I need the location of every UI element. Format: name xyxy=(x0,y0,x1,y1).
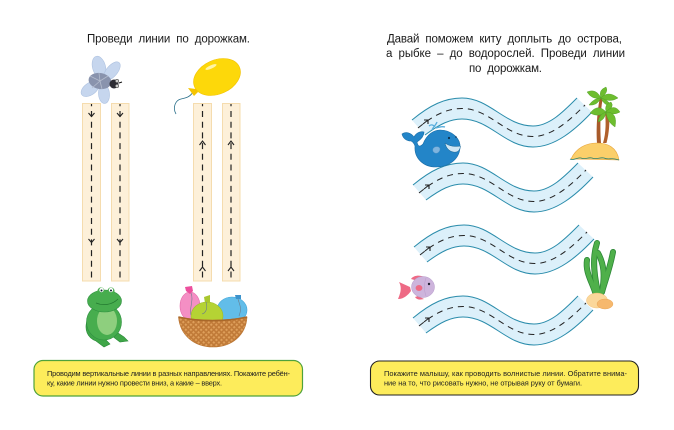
note: left xyxy=(34,360,302,396)
icon: fly xyxy=(78,55,123,104)
title: right page xyxy=(386,34,625,75)
note: right xyxy=(370,361,638,395)
icon: palm island xyxy=(570,87,620,160)
note: left: Проводим вертикальные линии в разных направлениях. Покажите ребён- xyxy=(47,369,291,378)
wavy track 3 xyxy=(414,225,594,274)
wavy track 2 xyxy=(413,163,593,212)
vertical track 2 xyxy=(112,104,129,281)
title: right page: по дорожкам. xyxy=(469,63,542,75)
icon: whale xyxy=(402,122,460,167)
icon: yellow balloon xyxy=(174,52,246,114)
icon: fish xyxy=(398,276,434,300)
note: right: ние на то, что рисовать нужно, не отрывая руку от бумаги. xyxy=(384,378,582,388)
note: right: Покажите малышу, как проводить волнистые линии. Обратите внима- xyxy=(384,369,628,378)
title: right page: Давай поможем киту доплыть до острова, xyxy=(387,34,622,46)
icon: basket of balloons xyxy=(178,286,247,347)
title: left page: Проведи линии по дорожкам. xyxy=(87,34,250,46)
icon: frog xyxy=(86,287,128,347)
title: right page: а рыбке – до водорослей. Проведи линии xyxy=(386,48,625,60)
wavy track 4 xyxy=(413,296,593,345)
wavy track 1 xyxy=(412,98,592,147)
icon: seaweed xyxy=(586,243,613,309)
vertical track 4 xyxy=(222,104,240,281)
vertical track 1 xyxy=(82,104,100,281)
vertical track 3 xyxy=(194,104,212,281)
note: left: ку, какие линии нужно провести вниз, а какие – вверх. xyxy=(47,378,222,388)
